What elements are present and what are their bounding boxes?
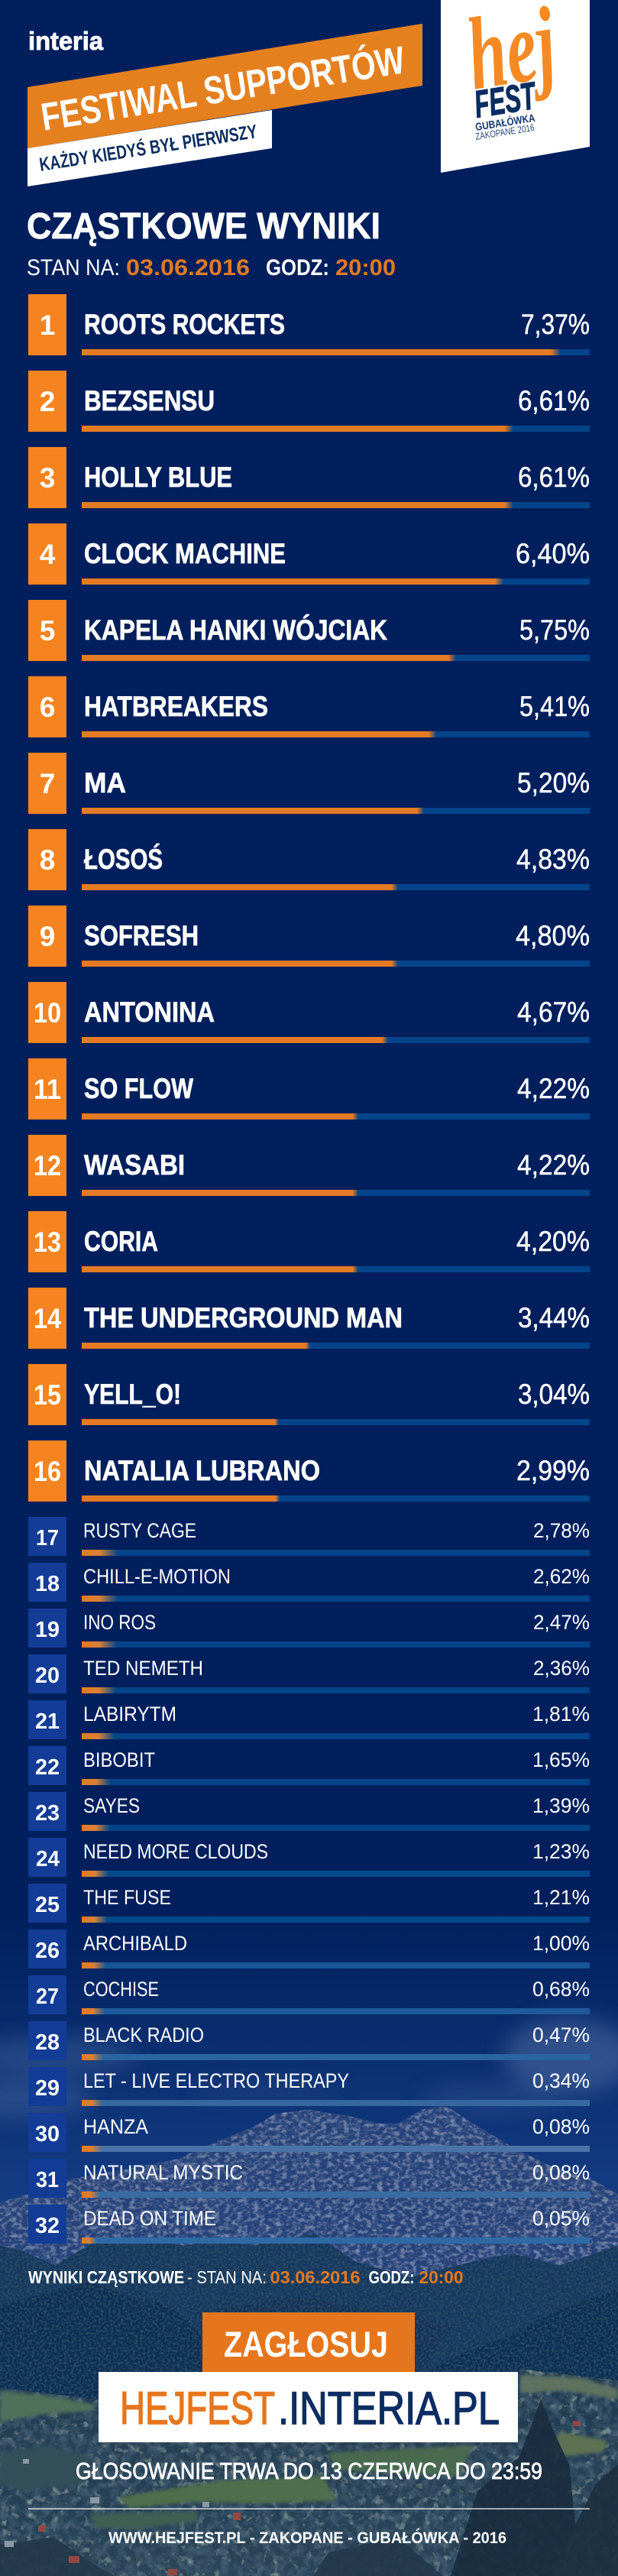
result row 20: 2,36% <box>533 1657 590 1680</box>
result row 6 <box>28 676 590 737</box>
result row 11 <box>28 1058 590 1120</box>
result row 11: SO FLOW <box>84 1073 193 1104</box>
status line: date and time <box>27 255 396 280</box>
result row 9: SOFRESH <box>84 920 199 951</box>
result row 14: 3,44% <box>518 1302 590 1333</box>
footer status line <box>28 2267 463 2287</box>
result row 18 <box>28 1563 590 1602</box>
result row 16 <box>28 1440 590 1502</box>
status line: date and time: STAN NA: <box>27 255 120 280</box>
footer address: WWW.HEJFEST.PL - ZAKOPANE - GUBAŁÓWKA - 2016 <box>108 2529 506 2547</box>
result row 14 <box>28 1288 590 1349</box>
result row 9 <box>28 906 590 967</box>
result row 13: 4,20% <box>516 1226 590 1257</box>
result row 20 <box>28 1654 590 1693</box>
result row 30: HANZA <box>83 2115 148 2138</box>
voting deadline: GŁOSOWANIE TRWA DO 13 CZERWCA DO 23:59 <box>76 2458 542 2484</box>
result row 15: 3,04% <box>518 1379 590 1410</box>
result row 24: NEED MORE CLOUDS <box>83 1840 268 1863</box>
result row 11: 4,22% <box>517 1073 590 1104</box>
call to action: website box: HEJFEST <box>120 2383 275 2434</box>
banner: festiwal supportów <box>28 24 422 186</box>
result row 2 <box>28 371 590 432</box>
result row 30: 30 <box>35 2122 60 2147</box>
result row 16: NATALIA LUBRANO <box>84 1455 320 1486</box>
result row 27: 0,68% <box>532 1978 590 2001</box>
result row 10: 10 <box>34 997 61 1029</box>
result row 22 <box>28 1746 590 1785</box>
result row 1: ROOTS ROCKETS <box>84 309 285 340</box>
result row 2: BEZSENSU <box>84 385 215 416</box>
result row 29: 0,34% <box>532 2069 590 2092</box>
result row 28: BLACK RADIO <box>83 2024 204 2046</box>
result row 7: 5,20% <box>517 767 590 799</box>
result row 15: YELL_O! <box>84 1379 181 1410</box>
result row 3: 6,61% <box>518 462 590 493</box>
result row 18: CHILL-E-MOTION <box>83 1565 231 1588</box>
result row 15 <box>28 1364 590 1425</box>
result row 19: 19 <box>35 1618 60 1642</box>
result row 31: 31 <box>36 2168 59 2192</box>
logo panel: hej fest <box>441 0 590 173</box>
result row 4 <box>28 523 590 585</box>
banner title: FESTIWAL SUPPORTÓW <box>38 37 408 139</box>
status line: date and time: 03.06.2016 <box>126 255 250 280</box>
result row 4: 4 <box>40 539 56 570</box>
result row 20: 20 <box>35 1664 60 1688</box>
result row 23 <box>28 1792 590 1831</box>
result row 19: INO ROS <box>83 1611 156 1634</box>
result row 2: 2 <box>40 386 55 417</box>
result row 18: 18 <box>35 1572 60 1596</box>
result row 5: 5 <box>40 615 55 646</box>
result row 6: 6 <box>40 692 55 723</box>
result row 20: TED NEMETH <box>83 1657 203 1680</box>
result row 12: WASABI <box>84 1149 185 1181</box>
footer status line: GODZ: <box>368 2267 414 2287</box>
result row 3 <box>28 447 590 508</box>
result row 19 <box>28 1609 590 1648</box>
result row 29: LET - LIVE ELECTRO THERAPY <box>83 2069 349 2092</box>
result row 8: 4,83% <box>516 844 590 875</box>
result row 30: 0,08% <box>532 2115 590 2138</box>
result row 22: 1,65% <box>532 1748 590 1771</box>
result row 8: 8 <box>40 844 55 876</box>
result row 23: SAYES <box>83 1794 140 1817</box>
result row 21 <box>28 1700 590 1739</box>
result row 18: 2,62% <box>533 1565 590 1588</box>
result row 17: RUSTY CAGE <box>83 1519 196 1542</box>
result row 29 <box>28 2067 590 2106</box>
result row 5: 5,75% <box>519 614 590 646</box>
result row 16: 16 <box>34 1456 61 1487</box>
result row 4: CLOCK MACHINE <box>84 538 286 569</box>
result row 12: 4,22% <box>517 1149 590 1181</box>
call to action: website box: .INTERIA.PL <box>278 2383 500 2434</box>
result row 1: 7,37% <box>521 309 590 340</box>
result row 31: 0,08% <box>532 2161 590 2184</box>
result row 3: HOLLY BLUE <box>84 462 232 493</box>
result row 14: 14 <box>34 1303 61 1334</box>
result row 26: ARCHIBALD <box>83 1932 187 1955</box>
call to action: zagłosuj <box>202 2312 415 2372</box>
result row 5 <box>28 600 590 661</box>
footer status line: - STAN NA: <box>187 2267 267 2287</box>
result row 13: CORIA <box>84 1226 158 1257</box>
result row 10 <box>28 982 590 1043</box>
result row 25: 1,21% <box>532 1886 590 1909</box>
result row 21: 21 <box>35 1709 60 1734</box>
result row 31: NATURAL MYSTIC <box>83 2161 243 2184</box>
result row 24: 24 <box>36 1847 60 1871</box>
result row 1 <box>28 294 590 355</box>
result row 7: MA <box>84 767 126 799</box>
result row 17 <box>28 1517 590 1556</box>
result row 31 <box>28 2159 590 2198</box>
result row 7 <box>28 753 590 814</box>
result row 12: 12 <box>34 1150 61 1181</box>
result row 22: BIBOBIT <box>83 1748 155 1771</box>
result row 15: 15 <box>34 1379 61 1411</box>
result row 30 <box>28 2113 590 2152</box>
result row 25: 25 <box>35 1893 60 1917</box>
result row 17: 2,78% <box>533 1519 590 1542</box>
result row 27: COCHISE <box>83 1978 159 2001</box>
result row 25: THE FUSE <box>83 1886 171 1909</box>
result row 21: 1,81% <box>532 1703 590 1725</box>
result row 17: 17 <box>36 1526 59 1550</box>
result row 28: 28 <box>35 2030 60 2055</box>
result row 6: HATBREAKERS <box>84 691 268 722</box>
footer status line: 03.06.2016 <box>270 2267 361 2287</box>
result row 24 <box>28 1838 590 1877</box>
result row 9: 4,80% <box>516 920 590 951</box>
result row 26: 26 <box>35 1939 60 1963</box>
result row 23: 1,39% <box>532 1794 590 1817</box>
result row 26 <box>28 1930 590 1968</box>
result row 25 <box>28 1884 590 1923</box>
result row 8: ŁOSOŚ <box>84 843 163 875</box>
result row 27: 27 <box>36 1985 59 2009</box>
result row 24: 1,23% <box>532 1840 590 1863</box>
result row 26: 1,00% <box>532 1932 590 1955</box>
call to action: zagłosuj: ZAGŁOSUJ <box>224 2324 388 2364</box>
result row 32: 32 <box>35 2214 60 2238</box>
result row 7: 7 <box>40 768 55 799</box>
footer status line: 20:00 <box>419 2267 463 2287</box>
result row 10: ANTONINA <box>84 996 215 1028</box>
logo text: gubałówka: GUBAŁÓWKA <box>474 111 535 133</box>
result row 21: LABIRYTM <box>83 1703 176 1725</box>
result row 3: 3 <box>40 462 55 494</box>
result row 13 <box>28 1211 590 1272</box>
result row 16: 2,99% <box>516 1455 590 1486</box>
result row 9: 9 <box>40 921 55 952</box>
result row 32 <box>28 2205 590 2244</box>
result row 32: DEAD ON TIME <box>83 2207 216 2230</box>
logo word: fest: FEST <box>471 74 540 126</box>
result row 22: 22 <box>35 1755 60 1780</box>
result row 27 <box>28 1975 590 2014</box>
result row 4: 6,40% <box>516 538 590 569</box>
footer status line: WYNIKI CZĄSTKOWE <box>28 2267 184 2287</box>
status line: date and time: GODZ: <box>266 255 329 280</box>
banner subtitle: KAŻDY KIEDYŚ BYŁ PIERWSZY <box>37 119 259 176</box>
result row 8 <box>28 829 590 890</box>
result row 6: 5,41% <box>519 691 590 722</box>
heading: cząstkowe wyniki: CZĄSTKOWE WYNIKI <box>27 206 380 247</box>
result row 13: 13 <box>34 1226 61 1258</box>
result row 32: 0,05% <box>532 2207 590 2230</box>
call to action: website box <box>99 2372 518 2442</box>
result row 28 <box>28 2021 590 2060</box>
result row 23: 23 <box>35 1801 60 1826</box>
logo: interia: interia <box>28 27 104 55</box>
result row 28: 0,47% <box>532 2024 590 2046</box>
result row 5: KAPELA HANKI WÓJCIAK <box>84 614 387 646</box>
result row 19: 2,47% <box>533 1611 590 1634</box>
status line: date and time: 20:00 <box>335 255 396 280</box>
result row 2: 6,61% <box>518 385 590 416</box>
result row 29: 29 <box>35 2076 60 2101</box>
result row 1: 1 <box>40 309 55 341</box>
result row 10: 4,67% <box>517 996 590 1028</box>
logo text: zakopane 2016: ZAKOPANE 2016 <box>474 122 535 142</box>
result row 14: THE UNDERGROUND MAN <box>84 1302 403 1333</box>
result row 12 <box>28 1135 590 1196</box>
result row 11: 11 <box>34 1074 61 1105</box>
